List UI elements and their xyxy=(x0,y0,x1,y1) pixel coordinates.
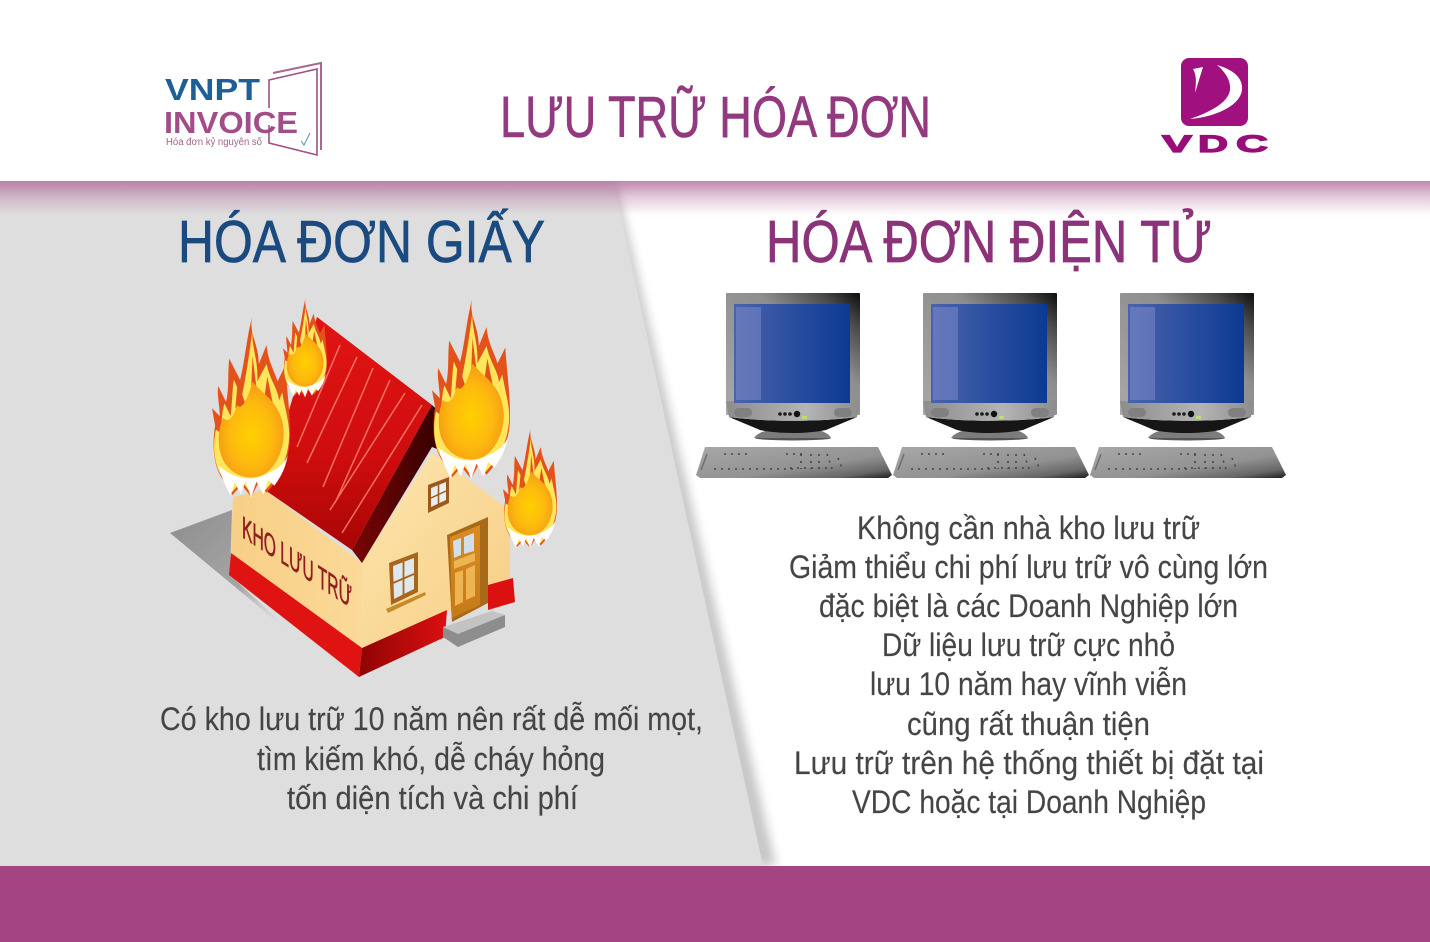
text block: electronic invoice benefits: VDC hoặc tại Doanh Nghiệp xyxy=(852,784,1206,820)
logo: VDC: D xyxy=(1198,131,1228,158)
text block: electronic invoice benefits: Không cần nhà kho lưu trữ xyxy=(857,510,1200,546)
text block: electronic invoice benefits: Lưu trữ trên hệ thống thiết bị đặt tại xyxy=(794,745,1264,781)
step xyxy=(443,611,505,647)
door xyxy=(447,517,488,622)
title: LƯU TRỮ HÓA ĐƠN xyxy=(500,85,931,150)
computer 2 xyxy=(893,293,1089,478)
logo: VDC: C xyxy=(1236,131,1268,158)
flame: right small xyxy=(503,427,557,549)
logo: VNPT Invoice: Hóa đơn kỷ nguyên số xyxy=(166,136,262,148)
text block: electronic invoice benefits: Dữ liệu lưu trữ cực nhỏ xyxy=(882,627,1175,663)
illustration: burning storage house xyxy=(170,315,515,677)
text block: electronic invoice benefits: cũng rất thuận tiện xyxy=(907,706,1150,742)
text block: electronic invoice benefits xyxy=(789,510,1268,820)
header shadow band xyxy=(0,181,1430,215)
footer bar xyxy=(0,866,1430,942)
panel: paper invoice grey background xyxy=(0,181,776,866)
logo: VNPT Invoice: VNPT xyxy=(165,72,260,107)
heading: paper invoice: HÓA ĐƠN GIẤY xyxy=(178,209,545,275)
text block: electronic invoice benefits: Giảm thiểu chi phí lưu trữ vô cùng lớn xyxy=(789,549,1268,585)
logo: VDC: V xyxy=(1162,131,1192,158)
label on wall: KHO LƯU TRỮ xyxy=(242,510,352,616)
text block: electronic invoice benefits: lưu 10 năm hay vĩnh viễn xyxy=(870,666,1187,702)
logo: VNPT Invoice: INVOICE xyxy=(164,105,298,140)
window xyxy=(386,552,426,613)
computer 3 xyxy=(1090,293,1286,478)
flame: left xyxy=(212,315,290,497)
text block: paper invoice drawbacks xyxy=(160,701,703,816)
text block: paper invoice drawbacks: tìm kiếm khó, dễ cháy hỏng xyxy=(257,741,605,777)
text block: paper invoice drawbacks: tốn diện tích và chi phí xyxy=(287,780,578,816)
flame: roof top xyxy=(283,297,327,397)
logo: VDC xyxy=(1162,58,1268,158)
attic window xyxy=(428,477,449,513)
computer 1 xyxy=(696,293,892,478)
text block: electronic invoice benefits: đặc biệt là các Doanh Nghiệp lớn xyxy=(819,588,1238,624)
heading: electronic invoice: HÓA ĐƠN ĐIỆN TỬ xyxy=(766,208,1212,275)
logo: VNPT Invoice xyxy=(164,63,321,155)
text block: paper invoice drawbacks: Có kho lưu trữ 10 năm nên rất dễ mối mọt, xyxy=(160,701,703,737)
flame: right large xyxy=(432,297,510,479)
red base xyxy=(229,553,515,677)
roof xyxy=(265,317,432,563)
